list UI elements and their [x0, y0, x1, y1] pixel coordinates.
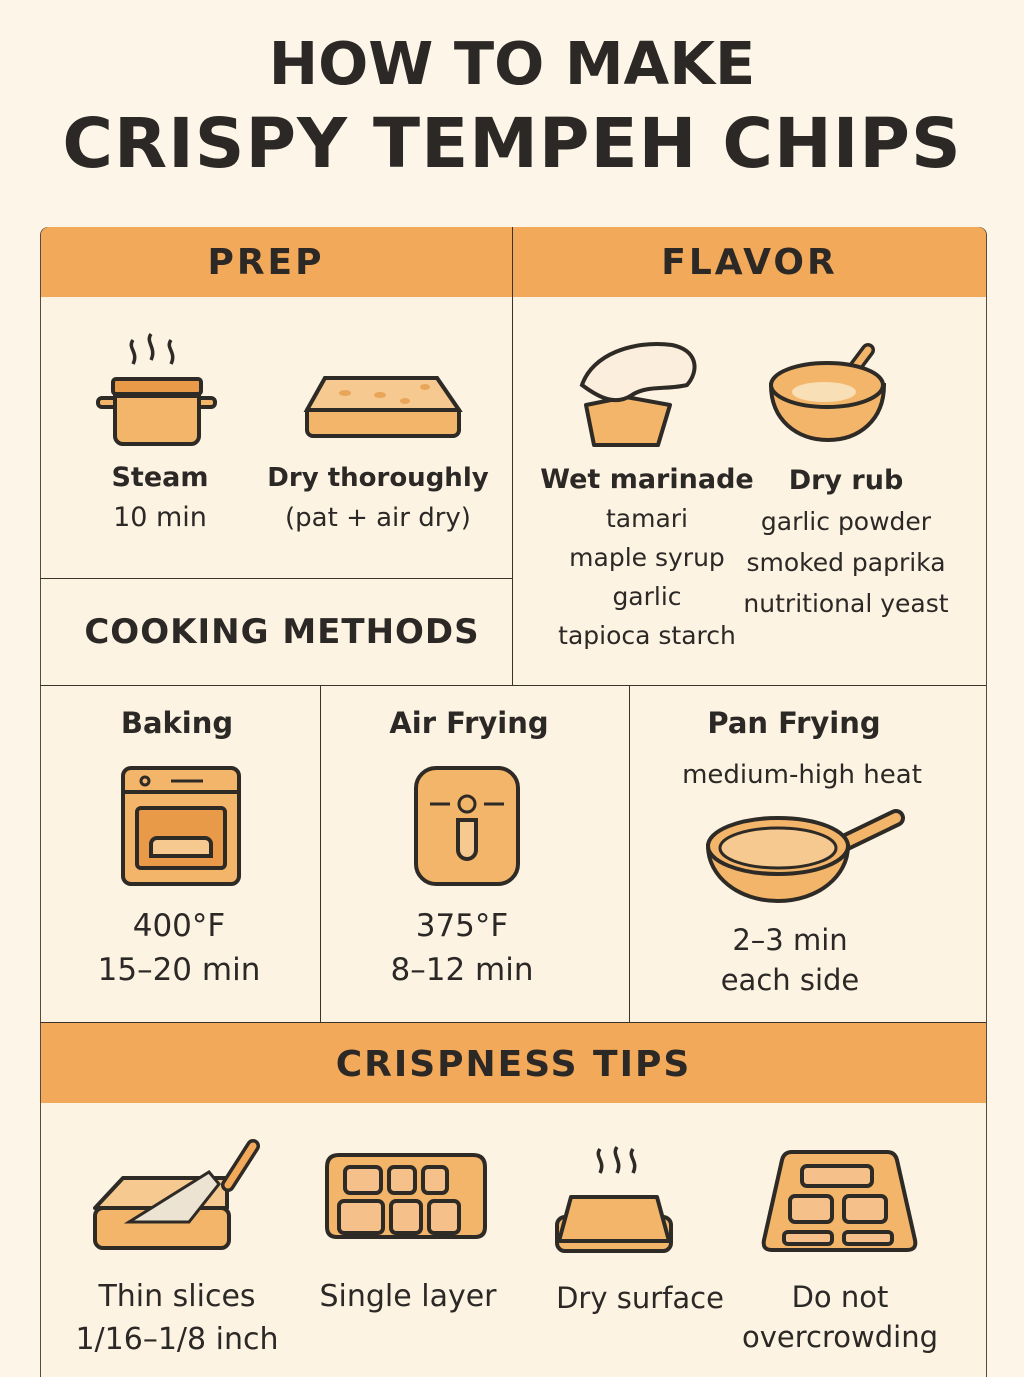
text: tips labels: [75, 1279, 279, 1357]
text: wet marinade: tamari: [606, 504, 688, 533]
text: dry rub: smoked paprika: [746, 548, 946, 577]
text: wet marinade: garlic: [612, 582, 682, 611]
text: dry thoroughly: Dry thoroughly: [267, 463, 489, 493]
icon: single layer tray: [325, 1153, 487, 1239]
text: dry rub: garlic powder: [761, 507, 931, 536]
method: baking: 400°F: [133, 908, 225, 944]
method: baking: 15–20 min: [98, 952, 260, 988]
method: air frying: 8–12 min: [390, 952, 533, 988]
icon: oven: [121, 766, 241, 886]
text: steam: 10 min: [113, 502, 207, 533]
text: overcrowding: [742, 1320, 938, 1354]
icon: hand marinade: [580, 342, 697, 447]
heading: cooking methods: COOKING METHODS: [84, 612, 480, 652]
text: dry thoroughly: [267, 463, 489, 533]
text: wet marinade: maple syrup: [569, 543, 725, 572]
text: Dry surface: [556, 1281, 724, 1315]
icon: crowded tray: [762, 1150, 918, 1252]
text: wet marinade: [540, 464, 754, 650]
method: pan frying: each side: [721, 963, 859, 997]
icon: steaming pot: [96, 333, 217, 446]
text: dry rub: [743, 465, 949, 618]
title: HOW TO MAKE: [269, 29, 755, 98]
text: steam: Steam: [111, 462, 209, 493]
header: PREP: [41, 227, 512, 297]
text: Do not: [792, 1280, 888, 1314]
icon: tempeh block: [304, 376, 463, 438]
title: CRISPY TEMPEH CHIPS: [62, 104, 962, 184]
method: air frying: 375°F: [416, 908, 508, 944]
header: PREP: PREP: [207, 242, 325, 283]
text: Single layer: [319, 1279, 497, 1314]
text: wet marinade: Wet marinade: [540, 464, 754, 495]
icon: bowl: [769, 343, 886, 442]
method: baking: [98, 706, 260, 988]
header: crispness tips: CRISPNESS TIPS: [336, 1044, 691, 1085]
method: baking: Baking: [121, 706, 233, 740]
icon: air fryer: [414, 766, 520, 886]
method: pan frying: Pan Frying: [707, 706, 881, 740]
text: tips labels: 1/16–1/8 inch: [75, 1322, 279, 1357]
method: pan frying: [682, 706, 922, 997]
icon: knife slicing: [93, 1139, 260, 1250]
header: crispness tips: [41, 1023, 986, 1103]
text: dry rub: Dry rub: [789, 465, 903, 496]
text: wet marinade: tapioca starch: [558, 621, 736, 650]
header: FLAVOR: FLAVOR: [661, 242, 838, 283]
title: [62, 29, 962, 184]
icon: dry surface: [555, 1146, 673, 1253]
text: dry thoroughly: (pat + air dry): [285, 503, 471, 533]
method: air frying: Air Frying: [389, 706, 549, 740]
text: dry rub: nutritional yeast: [743, 589, 949, 618]
method: pan frying: 2–3 min: [732, 923, 848, 957]
panel: frame: [40, 227, 987, 1377]
text: tips labels: Thin slices: [98, 1279, 256, 1314]
text: steam: [111, 462, 209, 533]
header: FLAVOR: [513, 227, 986, 297]
method: pan frying: medium-high heat: [682, 760, 922, 790]
method: air frying: [389, 706, 549, 988]
icon: frying pan: [706, 809, 905, 903]
